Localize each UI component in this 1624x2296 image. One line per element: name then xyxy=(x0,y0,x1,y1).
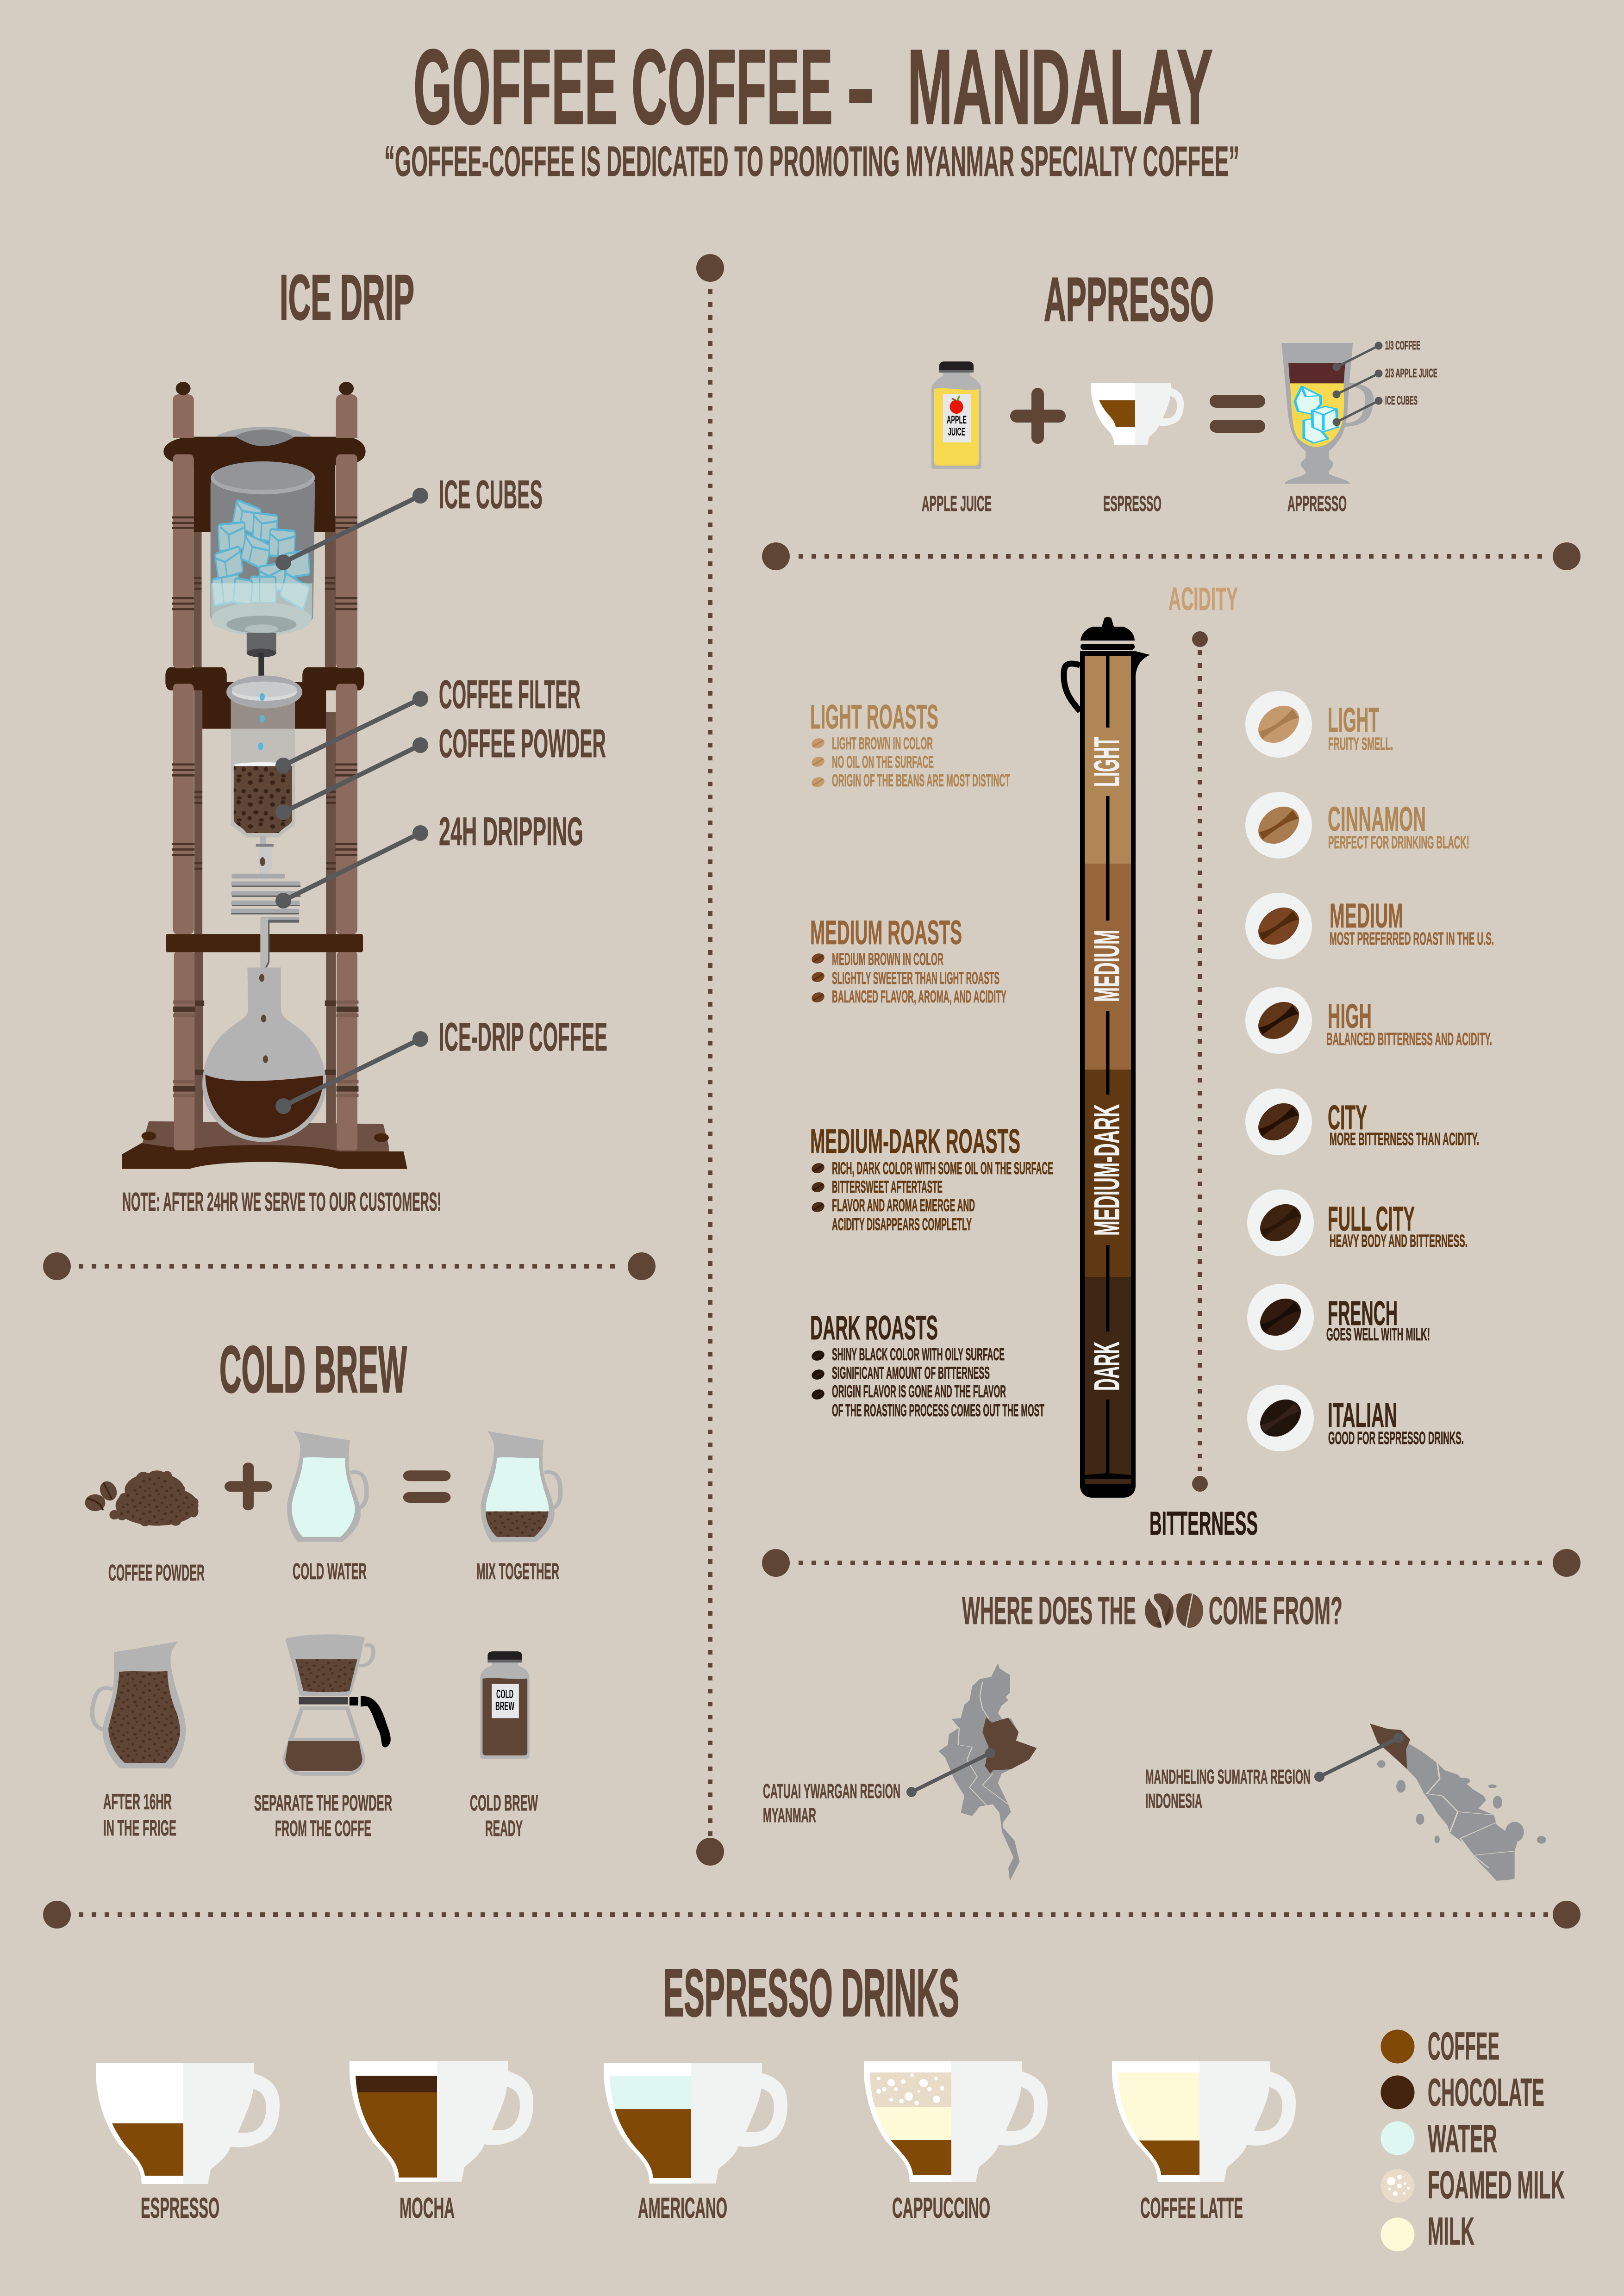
block: medium-dark roasts xyxy=(810,1123,1053,1234)
bean: italian xyxy=(1247,1385,1314,1451)
block: light roasts xyxy=(810,698,1010,790)
label: appresso: APPRESSO xyxy=(1287,492,1347,516)
text: city: CITY xyxy=(1328,1098,1367,1137)
panel: roast chart: PERFECT FOR DRINKING BLACK! xyxy=(1328,833,1469,852)
text: MIX TOGETHER xyxy=(476,1559,559,1584)
roast tube: MEDIUM xyxy=(1087,930,1127,1002)
icon: cold brew bottle xyxy=(480,1651,530,1759)
block: medium-dark roasts: FLAVOR AND AROMA EMERGE AND xyxy=(832,1196,975,1215)
panel: roast chart: SLIGHTLY SWEETER THAN LIGHT ROASTS xyxy=(832,969,999,988)
text: light: LIGHT xyxy=(1328,701,1379,739)
block: dark roasts: DARK ROASTS xyxy=(810,1309,938,1347)
panel: roast chart: GOES WELL WITH MILK! xyxy=(1326,1325,1430,1344)
text: COFFEE POWDER xyxy=(439,722,606,766)
panel: roast chart: BALANCED FLAVOR, AROMA, AND ACIDITY xyxy=(832,987,1006,1006)
panel: roast chart: RICH, DARK COLOR WITH SOME OIL ON THE SURFACE xyxy=(832,1159,1053,1178)
icon: apple juice bottle xyxy=(931,361,981,469)
bean: medium xyxy=(1245,893,1312,959)
panel: espresso drinks: COFFEE LATTE xyxy=(1140,2192,1243,2224)
panel: appresso xyxy=(922,265,1437,516)
bean: light xyxy=(1245,691,1312,758)
block: dark roasts xyxy=(810,1309,1044,1420)
block: light roasts: LIGHT BROWN IN COLOR xyxy=(832,734,933,753)
pointer: 24h dripping xyxy=(275,825,428,908)
label: myanmar: MYANMAR xyxy=(763,1804,816,1827)
label: sumatra xyxy=(1145,1766,1311,1812)
label: separate the powder: SEPARATE THE POWDER xyxy=(254,1791,392,1816)
filter chamber xyxy=(226,676,302,874)
text: french xyxy=(1326,1294,1430,1344)
label: 1/3 coffee: 1/3 COFFEE xyxy=(1385,338,1420,352)
bean: cinnamon xyxy=(1245,792,1312,859)
title: - xyxy=(846,27,875,146)
label: sumatra: INDONESIA xyxy=(1145,1790,1202,1812)
heading: where does the coffee come from: COME FROM? xyxy=(1209,1589,1343,1632)
legend xyxy=(1380,2024,1565,2253)
block: medium roasts: MEDIUM BROWN IN COLOR xyxy=(832,950,943,969)
icon: dripper carafe xyxy=(285,1634,391,1774)
label: cold brew ready xyxy=(470,1791,538,1841)
label: sumatra: MANDHELING SUMATRA REGION xyxy=(1145,1766,1311,1788)
label: after 16hr in the frige xyxy=(103,1789,176,1840)
block: light roasts: NO OIL ON THE SURFACE xyxy=(832,753,934,772)
panel: cold brew: BREW xyxy=(495,1699,514,1713)
label: myanmar: CATUAI YWARGAN REGION xyxy=(763,1780,900,1803)
panel: cold brew: COLD xyxy=(496,1687,513,1701)
label: apple juice: APPLE JUICE xyxy=(922,492,992,516)
icon: mixed jug xyxy=(481,1431,561,1542)
panel: roast chart: FRUITY SMELL. xyxy=(1328,734,1393,754)
panel: cold brew: COLD BREW xyxy=(219,1333,407,1406)
text: full city: FULL CITY xyxy=(1328,1200,1415,1238)
text: cinnamon xyxy=(1328,800,1469,852)
text: medium xyxy=(1330,896,1494,949)
label: separate the powder: FROM THE COFFE xyxy=(275,1817,371,1841)
panel: cold brew: COLD WATER xyxy=(293,1559,367,1584)
text: french: FRENCH xyxy=(1328,1294,1398,1332)
panel: origins xyxy=(763,1589,1546,1881)
ice drip tower illustration xyxy=(122,382,407,1169)
block: light roasts: LIGHT ROASTS xyxy=(810,698,938,736)
icon: coffee powder pile xyxy=(85,1470,198,1526)
panel: appresso: ICE CUBES xyxy=(1385,393,1418,407)
panel: espresso drinks: ESPRESSO xyxy=(141,2192,219,2224)
label: 24h dripping: 24H DRIPPING xyxy=(439,809,583,854)
label: myanmar xyxy=(763,1780,900,1827)
cup: mocha xyxy=(349,2061,533,2182)
glass flask with coffee xyxy=(202,968,326,1142)
icon: apple juice bottle: APPLE xyxy=(947,414,967,426)
text: cinnamon: CINNAMON xyxy=(1328,800,1426,838)
bean: french xyxy=(1247,1284,1314,1350)
label: separate the powder xyxy=(254,1791,392,1841)
panel: roast chart: HEAVY BODY AND BITTERNESS. xyxy=(1330,1232,1468,1251)
label: mocha: MOCHA xyxy=(400,2192,455,2224)
pointers: appresso parts xyxy=(1334,343,1381,425)
panel: roast chart: ORIGIN OF THE BEANS ARE MOST DISTINCT xyxy=(832,771,1010,790)
panel: cold brew xyxy=(85,1333,561,1841)
block: medium roasts xyxy=(810,914,1006,1006)
cooling coil xyxy=(231,869,300,922)
icon: water jug xyxy=(287,1431,367,1542)
text: high xyxy=(1326,997,1492,1049)
label: americano: AMERICANO xyxy=(638,2192,727,2224)
title: GOFFEE COFFEE xyxy=(413,27,833,146)
panel: appresso: ESPRESSO xyxy=(1103,492,1162,516)
legend: MILK xyxy=(1428,2209,1474,2253)
icon: espresso cup xyxy=(1091,383,1184,445)
panel: roast chart: GOOD FOR ESPRESSO DRINKS. xyxy=(1328,1429,1464,1448)
icon: steeped jug xyxy=(92,1642,186,1768)
panel: ice drip: ICE CUBES xyxy=(439,473,543,517)
panel: roast chart: OF THE ROASTING PROCESS COMES OUT THE MOST xyxy=(832,1401,1044,1420)
block: medium-dark roasts: BITTERSWEET AFTERTASTE xyxy=(832,1177,943,1196)
axis label: bitterness: BITTERNESS xyxy=(1149,1506,1258,1542)
cup: espresso xyxy=(95,2063,280,2184)
icon: plus xyxy=(225,1462,272,1510)
panel: ice drip: NOTE: AFTER 24HR WE SERVE TO OUR CUSTOMERS! xyxy=(122,1187,441,1217)
block: medium-dark roasts: ACIDITY DISAPPEARS COMPLETLY xyxy=(832,1215,972,1234)
block: dark roasts: SIGNIFICANT AMOUNT OF BITTERNESS xyxy=(832,1363,990,1382)
legend: WATER xyxy=(1428,2117,1497,2160)
block: dark roasts: ORIGIN FLAVOR IS GONE AND THE FLAVOR xyxy=(832,1382,1006,1401)
cup: coffee latte xyxy=(1112,2061,1296,2182)
panel: espresso drinks xyxy=(95,1955,1565,2253)
panel: cold brew: COFFEE POWDER xyxy=(108,1561,205,1586)
icon: equals xyxy=(403,1470,450,1503)
icon: appresso glass xyxy=(1281,343,1369,484)
cup: americano xyxy=(603,2063,787,2184)
heading: where does the coffee come from: WHERE DOES THE xyxy=(962,1589,1136,1632)
pointer: coffee filter xyxy=(275,691,428,773)
roast tube: LIGHT xyxy=(1087,737,1127,787)
roast tube xyxy=(1064,617,1150,1498)
text: light xyxy=(1328,701,1393,754)
panel: roast chart xyxy=(810,581,1494,1542)
block: medium roasts: MEDIUM ROASTS xyxy=(810,914,962,952)
axis label: acidity: ACIDITY xyxy=(1168,581,1238,617)
label: 2/3 apple juice: 2/3 APPLE JUICE xyxy=(1385,366,1437,380)
pointer: ice-drip coffee xyxy=(275,1031,428,1114)
text: city: MORE BITTERNESS THAN ACIDITY. xyxy=(1330,1130,1479,1149)
cup: cappuccino xyxy=(863,2061,1048,2182)
pointer: ice cubes xyxy=(275,488,428,570)
label: cold brew ready: READY xyxy=(485,1817,523,1841)
pointer: sumatra xyxy=(1314,1733,1404,1782)
pointer: myanmar xyxy=(906,1748,995,1797)
text: full city xyxy=(1328,1200,1468,1251)
icon: plus xyxy=(1010,388,1066,444)
pointer: coffee powder xyxy=(275,737,428,820)
text: ICE-DRIP COFFEE xyxy=(439,1015,607,1059)
bean: full city xyxy=(1247,1189,1314,1256)
roast tube: MEDIUM-DARK xyxy=(1087,1104,1127,1236)
panel: espresso drinks: ESPRESSO DRINKS xyxy=(663,1955,959,2030)
panel: cold brew: COLD BREW xyxy=(470,1791,538,1816)
label: after 16hr in the frige: IN THE FRIGE xyxy=(103,1816,176,1840)
label: after 16hr in the frige: AFTER 16HR xyxy=(103,1789,172,1814)
panel: ice drip xyxy=(122,262,607,1217)
bean: high xyxy=(1245,987,1312,1054)
text: italian: ITALIAN xyxy=(1328,1396,1397,1434)
icon: equals xyxy=(1210,395,1265,433)
title: MANDALAY xyxy=(907,27,1213,146)
block: medium-dark roasts: MEDIUM-DARK ROASTS xyxy=(810,1123,1020,1160)
map: sumatra xyxy=(1370,1724,1546,1881)
panel: appresso: APPRESSO xyxy=(1044,265,1214,334)
legend: COFFEE xyxy=(1428,2024,1499,2068)
bean: city xyxy=(1245,1089,1312,1155)
text: high: HIGH xyxy=(1328,997,1372,1035)
label: cappuccino: CAPPUCCINO xyxy=(892,2192,990,2224)
cold brew illustrations xyxy=(85,1431,561,1774)
panel: ice drip: ICE DRIP xyxy=(280,262,414,333)
icon: apple juice bottle: JUICE xyxy=(948,426,965,438)
text: medium: MEDIUM xyxy=(1330,896,1403,935)
ice jar xyxy=(211,461,315,676)
map: myanmar xyxy=(938,1663,1037,1881)
panel: ice drip: COFFEE FILTER xyxy=(439,672,581,717)
roast tube: DARK xyxy=(1087,1342,1127,1391)
block: dark roasts: SHINY BLACK COLOR WITH OILY SURFACE xyxy=(832,1345,1005,1364)
text: city xyxy=(1328,1098,1479,1149)
